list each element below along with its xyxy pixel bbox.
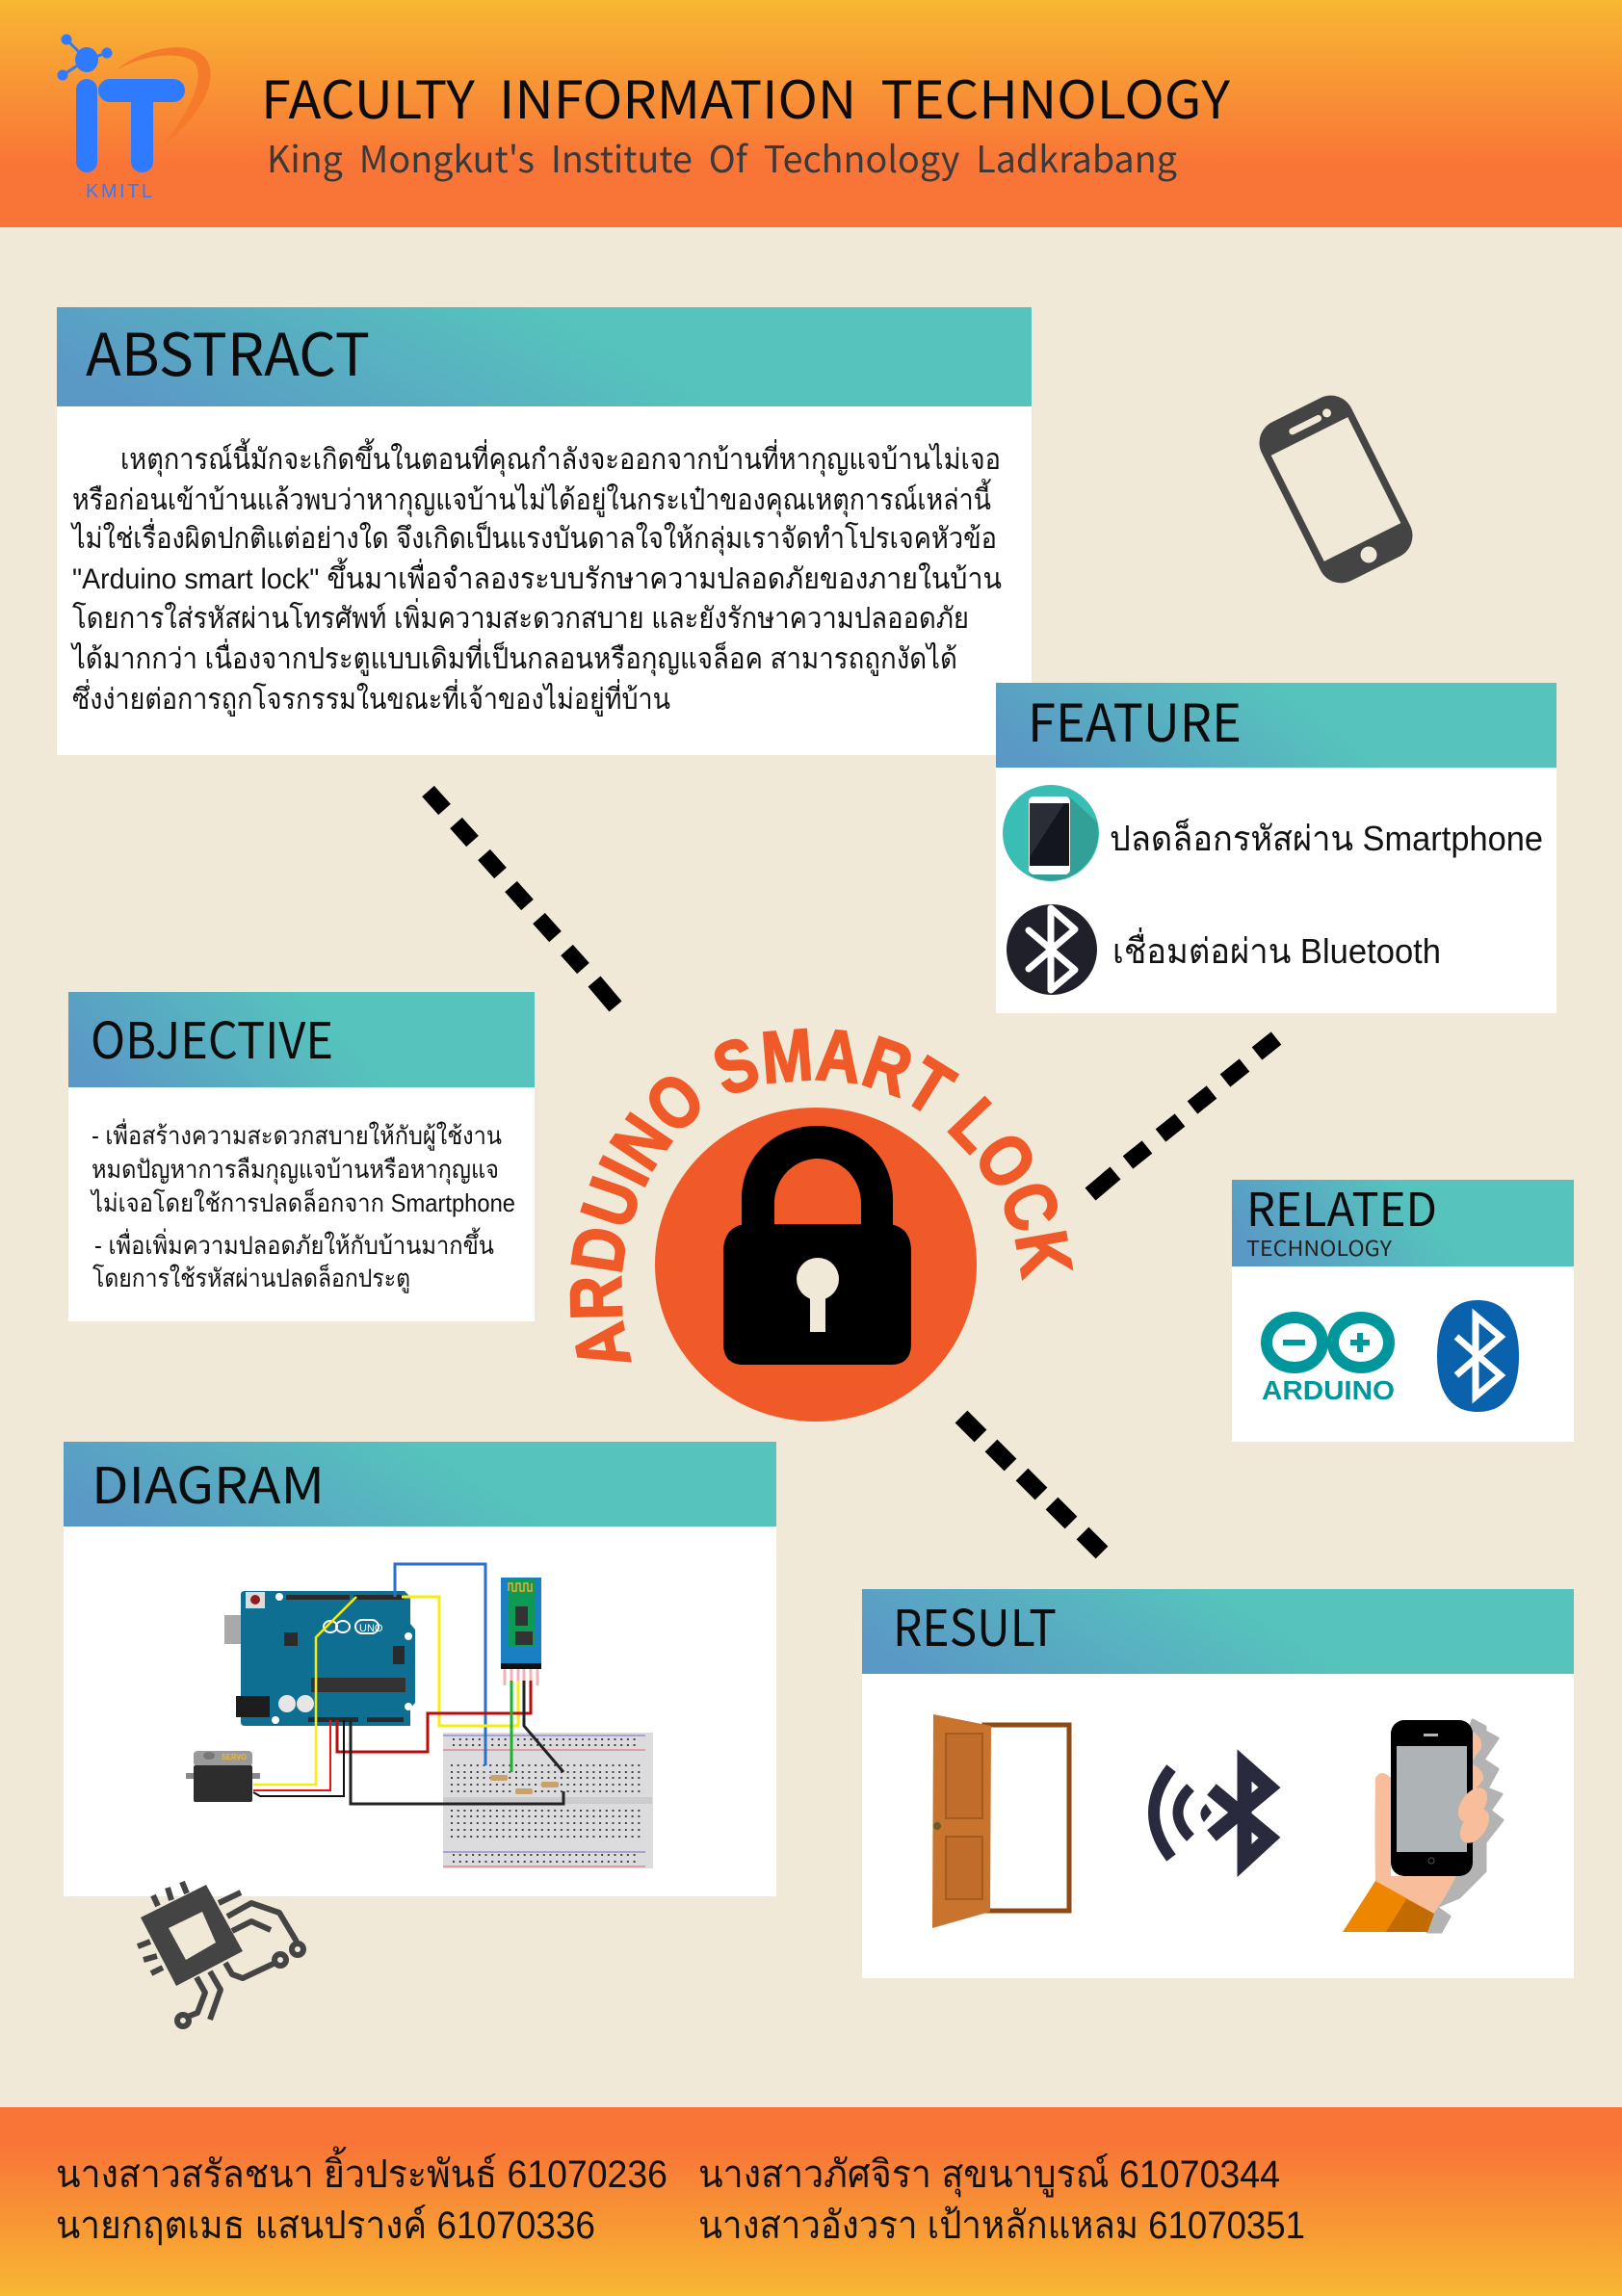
icon: microchip bbox=[138, 1882, 303, 2026]
heading: related: RELATED bbox=[1246, 1172, 1437, 1239]
abstract body text: เหตุการณ์นี้มักจะเกิดขึ้นในตอนที่คุณกำลังจะออกจากบ้านที่หากุญแจบ้านไม่เจอ bbox=[120, 438, 1001, 478]
panel: result bbox=[862, 1588, 1574, 1978]
icon: smartphone circle bbox=[1003, 785, 1099, 881]
center emblem: lock bbox=[570, 1029, 1073, 1422]
icon: bluetooth circle bbox=[1007, 904, 1097, 995]
servo motor bbox=[186, 1751, 260, 1802]
icon: smartphone outline bbox=[1251, 387, 1421, 591]
arduino board: UNO bbox=[359, 1623, 383, 1634]
abstract body text: "Arduino smart lock" ขึ้นมาเพื่อจำลองระบบรักษาความปลอดภัยของภายในบ้าน bbox=[72, 558, 1002, 595]
objective text bbox=[90, 1118, 515, 1293]
member names bbox=[56, 2146, 1305, 2247]
panel: abstract bbox=[57, 307, 1032, 755]
heading: objective: OBJECTIVE bbox=[91, 1001, 333, 1073]
panel: objective bbox=[68, 992, 535, 1321]
panel: related technology bbox=[1232, 1172, 1574, 1442]
member names: นางสาวอังวรา เป้าหลักแหลม 61070351 bbox=[698, 2205, 1305, 2247]
header band bbox=[0, 0, 1622, 227]
objective text: - เพื่อสร้างความสะดวกสบายให้กับผู้ใช้งาน bbox=[92, 1118, 502, 1151]
dashed connector: result bbox=[961, 1417, 1102, 1552]
icon: hand holding phone bbox=[1343, 1720, 1503, 1932]
feature text: smartphone: ปลดล็อกรหัสผ่าน Smartphone bbox=[1110, 817, 1543, 858]
abstract body text: ได้มากกว่า เนื่องจากประตูแบบเดิมที่เป็นกลอนหรือกุญแจล็อค สามารถถูกงัดได้ bbox=[70, 639, 957, 677]
bluetooth module bbox=[501, 1578, 541, 1685]
panel: feature bbox=[996, 681, 1557, 1013]
subheading: technology: TECHNOLOGY bbox=[1246, 1232, 1392, 1263]
icon: arduino logo bbox=[1262, 1318, 1395, 1405]
heading: feature: FEATURE bbox=[1028, 681, 1242, 757]
member names: นายกฤตเมธ แสนปรางค์ 61070336 bbox=[56, 2204, 595, 2247]
title: FACULTY INFORMATION TECHNOLOGY bbox=[261, 58, 1230, 134]
icon: arduino logo: ARDUINO bbox=[1262, 1375, 1395, 1405]
abstract body text: ซึ่งง่ายต่อการถูกโจรกรรมในขณะที่เจ้าของไม่อยู่ที่บ้าน bbox=[72, 679, 670, 717]
abstract body text: ไม่ใช่เรื่องผิดปกติแต่อย่างใด จึงเกิดเป็นแรงบันดาลใจให้กลุ่มเราจัดทำโปรเจคหัวข้อ bbox=[70, 518, 997, 557]
logo: IT KMITL: KMITL bbox=[86, 181, 152, 202]
arduino board bbox=[224, 1591, 415, 1726]
heading: abstract: ABSTRACT bbox=[86, 307, 370, 393]
breadboard bbox=[443, 1733, 653, 1868]
objective text: ไม่เจอโดยใช้การปลดล็อกจาก Smartphone bbox=[90, 1187, 515, 1217]
panel: diagram bbox=[64, 1442, 776, 1896]
servo motor: SERVO bbox=[222, 1753, 247, 1761]
objective text: โดยการใช้รหัสผ่านปลดล็อกประตู bbox=[92, 1263, 410, 1293]
icon: bluetooth signal bbox=[1154, 1765, 1269, 1861]
wiring bbox=[253, 1564, 563, 1804]
icon: open door bbox=[932, 1714, 1069, 1928]
logo: IT KMITL bbox=[58, 35, 211, 202]
footer band bbox=[0, 2107, 1622, 2296]
dashed connector: feature bbox=[1090, 1038, 1276, 1194]
member names: นางสาวสรัลชนา ยิ้วประพันธ์ 61070236 bbox=[56, 2146, 667, 2196]
curved title: ARDUINO SMART LOCK bbox=[570, 1029, 1073, 1363]
subtitle: King Mongkut's Institute Of Technology Ladkrabang bbox=[267, 130, 1177, 183]
objective text: - เพื่อเพิ่มความปลอดภัยให้กับบ้านมากขึ้น bbox=[94, 1227, 494, 1260]
abstract body text: หรือก่อนเข้าบ้านแล้วพบว่าหากุญแจบ้านไม่ได้อยู่ในกระเป๋าของคุณเหตุการณ์เหล่านี้ bbox=[72, 479, 991, 518]
abstract body text bbox=[70, 438, 1002, 717]
heading: diagram: DIAGRAM bbox=[92, 1446, 325, 1518]
icon: bluetooth badge bbox=[1437, 1300, 1519, 1412]
heading: result: RESULT bbox=[893, 1588, 1057, 1660]
dashed connector: abstract bbox=[428, 792, 615, 1006]
objective text: หมดปัญหาการลืมกุญแจบ้านหรือหากุญแจ bbox=[92, 1155, 499, 1185]
feature text: bluetooth: เชื่อมต่อผ่าน Bluetooth bbox=[1112, 927, 1441, 971]
member names: นางสาวภัศจิรา สุขนาบูรณ์ 61070344 bbox=[698, 2152, 1280, 2198]
abstract body text: โดยการใส่รหัสผ่านโทรศัพท์ เพิ่มความสะดวกสบาย และยังรักษาความปลออดภัย bbox=[72, 598, 969, 635]
